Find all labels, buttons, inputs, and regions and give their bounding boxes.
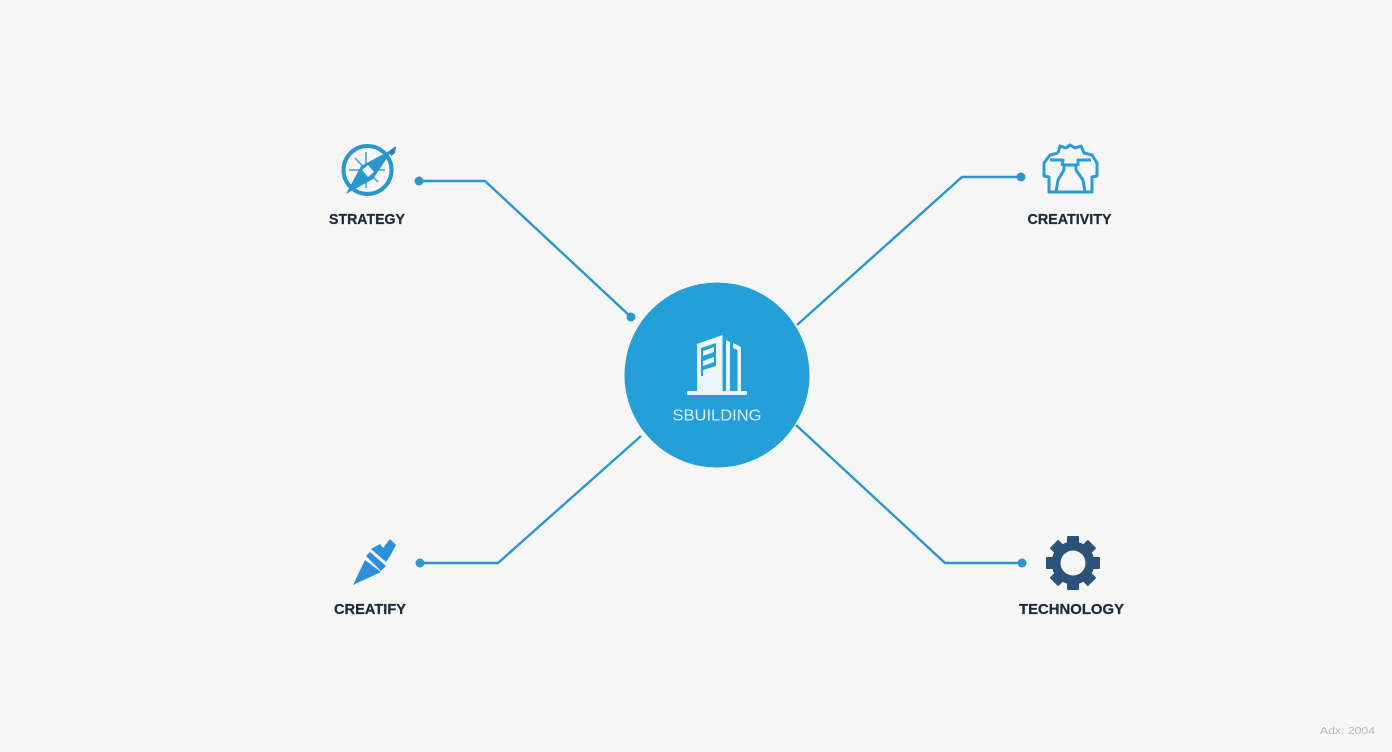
icon: marker pen (353, 539, 396, 585)
node: technology (1019, 536, 1124, 618)
node: creativity top right (1028, 145, 1112, 228)
connector: creativity top right (797, 172, 1026, 325)
watermark: Adx: 2004 (1320, 726, 1376, 737)
connector: technology (796, 425, 1026, 568)
icon: compass (344, 146, 396, 194)
icon: creativity outline (1044, 145, 1097, 192)
label: creatify: CREATIFY (334, 601, 406, 618)
label: creativity: CREATIVITY (1028, 211, 1112, 228)
node: creativity bottom left (334, 539, 406, 618)
label: strategy: STRATEGY (329, 211, 405, 228)
connector: strategy (414, 176, 636, 322)
icon: gear (1046, 536, 1100, 590)
icon: building (687, 335, 747, 395)
central hub (624, 282, 810, 468)
connector: creativity bottom left (416, 436, 641, 568)
label: technology: TECHNOLOGY (1019, 601, 1124, 618)
hub label: SBUILDING (672, 408, 762, 424)
node: strategy (329, 146, 405, 228)
